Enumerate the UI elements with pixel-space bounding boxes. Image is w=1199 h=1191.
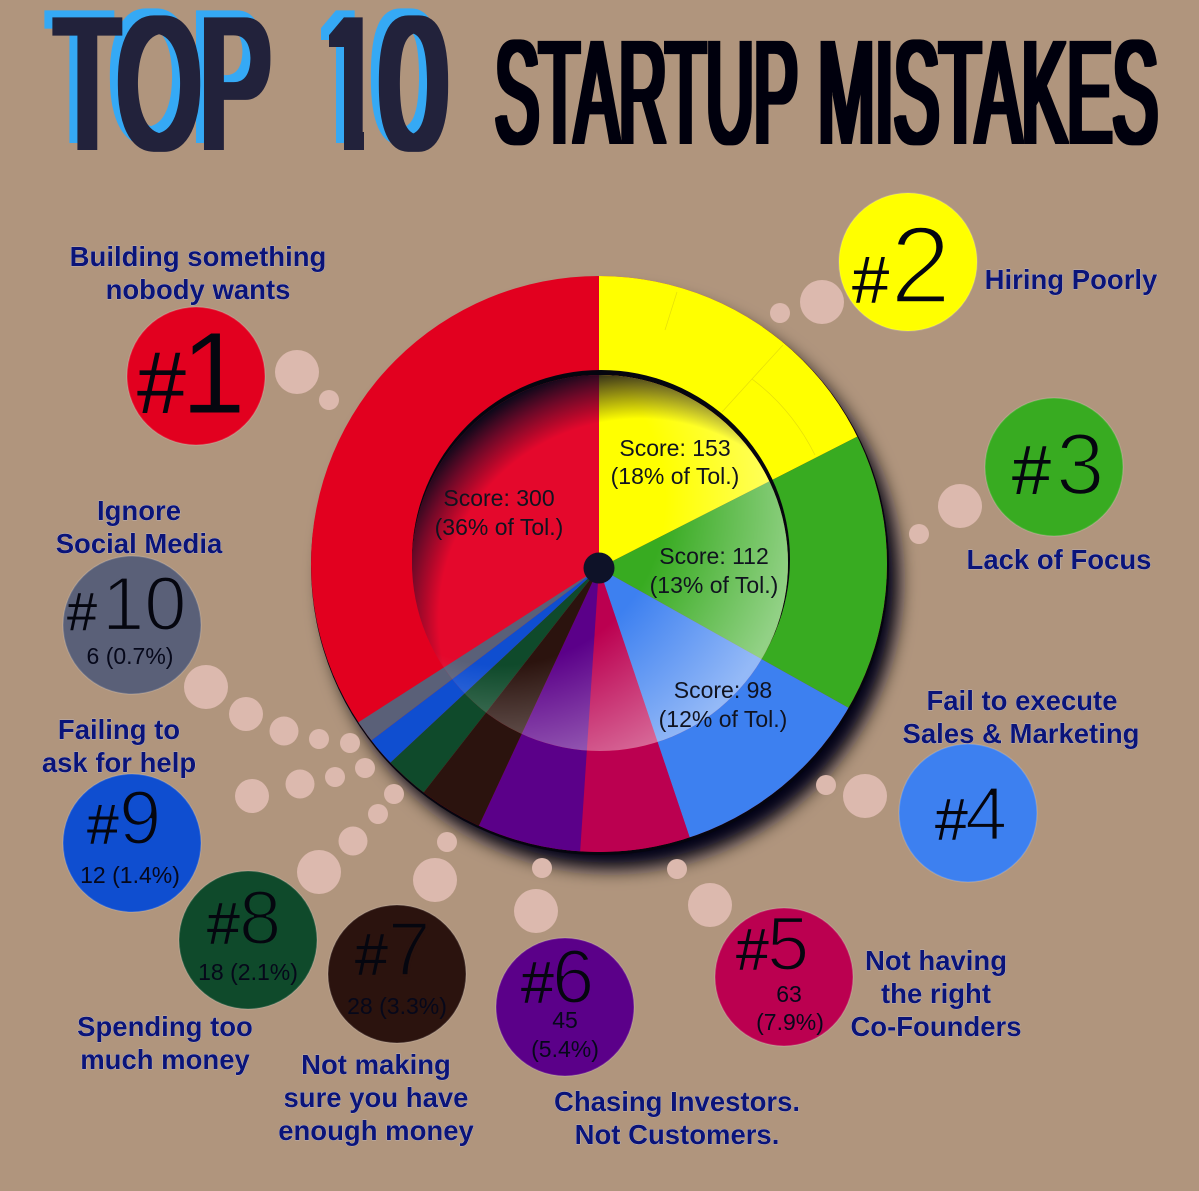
badge #1: #: [137, 333, 186, 432]
badge #4: #: [935, 787, 968, 853]
label #9: Failing to: [58, 714, 180, 745]
label #8: much money: [80, 1044, 251, 1075]
badge #5: #: [736, 917, 769, 983]
badge #3: #: [1012, 431, 1051, 509]
center hub: [584, 552, 614, 584]
label #1: nobody wants: [106, 274, 290, 305]
black rim: [311, 277, 889, 855]
badge #7: [328, 905, 466, 1043]
drop shadow: [323, 293, 899, 869]
badge #5: [715, 902, 853, 1046]
badge #10: 6 (0.7%): [87, 643, 173, 669]
score labels: (12% of Tol.): [659, 706, 787, 732]
badge #2: 2: [890, 204, 951, 327]
label #8: Spending too: [77, 1011, 253, 1042]
glass lens: [412, 375, 788, 751]
badge #5: (7.9%): [756, 1009, 824, 1035]
badge #5: 63: [776, 981, 802, 1007]
score labels: (18% of Tol.): [611, 463, 739, 489]
badge #7: #: [355, 922, 388, 988]
score labels: Score: 112: [659, 543, 769, 569]
badge #8: 8: [239, 876, 281, 961]
title: STARTUP MISTAKES: STARTUP: [495, 11, 798, 175]
pie wedges: [311, 276, 887, 852]
label #4: [903, 685, 1139, 749]
score labels: Score: 153: [619, 435, 731, 461]
label #2: Hiring Poorly: [985, 264, 1158, 295]
lens rim: [412, 370, 790, 748]
score labels: (13% of Tol.): [650, 572, 778, 598]
badge #9: [63, 774, 201, 912]
label #10: Ignore: [97, 495, 181, 526]
badge #1: [127, 307, 265, 445]
badge #6: (5.4%): [531, 1036, 599, 1062]
label #3: Lack of Focus: [967, 544, 1151, 575]
badge #4: 4: [965, 772, 1007, 857]
badge #8: #: [207, 891, 240, 957]
score labels: Score: 300: [443, 485, 555, 511]
badge #9: 9: [119, 776, 161, 861]
badge #2: [839, 193, 977, 331]
label #4: Fail to execute: [926, 685, 1118, 716]
donut chart: [309, 276, 913, 883]
badge #6: 6: [552, 935, 594, 1020]
label #7: Not making: [301, 1049, 451, 1080]
label #7: enough money: [278, 1115, 474, 1146]
badge #5: 5: [767, 902, 809, 987]
label #7: [278, 1049, 474, 1146]
badge #8: [179, 871, 317, 1009]
label #6: Chasing Investors.: [554, 1086, 800, 1117]
badge #7: 28 (3.3%): [347, 993, 447, 1019]
label #5: Not having: [865, 945, 1007, 976]
badge #10: [63, 556, 201, 694]
badge #6: [496, 935, 634, 1076]
score labels: Score: 98: [674, 677, 772, 703]
badge #2: #: [852, 243, 889, 318]
label #5: the right: [881, 978, 991, 1009]
badge #9: #: [87, 793, 119, 857]
connector dots: [184, 280, 982, 933]
label #6: Not Customers.: [575, 1119, 779, 1150]
badge #10: 10: [102, 562, 187, 647]
label #5: Co-Founders: [850, 1011, 1022, 1042]
label #10: Social Media: [56, 528, 223, 559]
badge #3: [985, 398, 1123, 536]
label #4: Sales & Marketing: [903, 718, 1139, 749]
badge #6: 45: [552, 1007, 578, 1033]
label #9: ask for help: [42, 747, 196, 778]
badge #6: #: [521, 950, 554, 1016]
label #9: [42, 714, 196, 778]
label #1: Building something: [70, 241, 326, 272]
badge #1: 1: [181, 308, 246, 438]
label #6: [554, 1086, 800, 1150]
score labels: (36% of Tol.): [435, 514, 563, 540]
badge #4: [899, 744, 1037, 882]
label #10: [56, 495, 223, 559]
label #8: [77, 1011, 253, 1075]
badge #7: 7: [388, 907, 430, 992]
badge #8: 18 (2.1%): [198, 959, 298, 985]
score labels: [435, 435, 787, 732]
label #1: [70, 241, 326, 305]
badge #9: 12 (1.4%): [80, 862, 180, 888]
label #7: sure you have: [284, 1082, 468, 1113]
label #5: [850, 945, 1022, 1042]
badge #3: 3: [1056, 416, 1104, 513]
badge #10: #: [67, 582, 97, 642]
